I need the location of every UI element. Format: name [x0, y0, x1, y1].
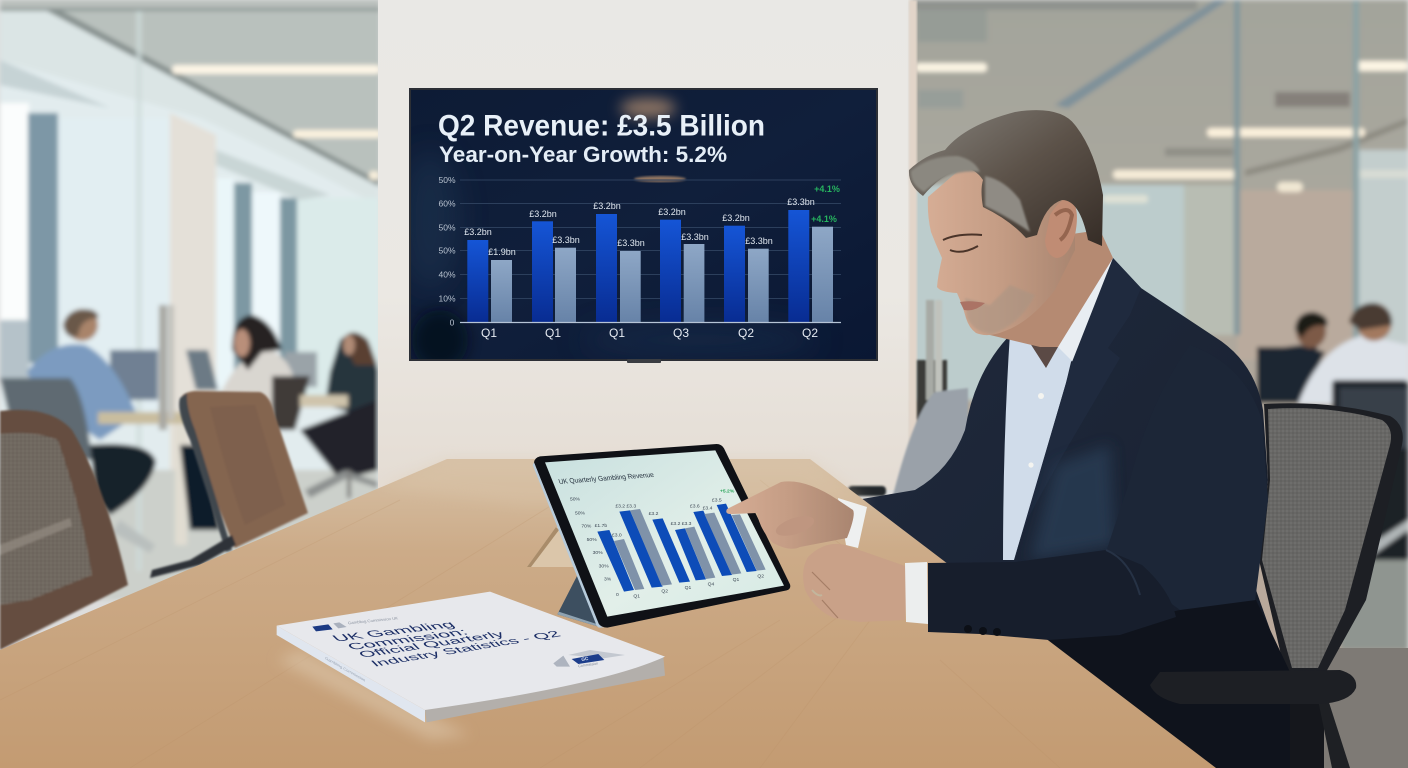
TV bar chart: 50% — [438, 175, 456, 185]
tablet bars: Q4 — [708, 582, 715, 588]
booklet title: Industry Statistics - Q2 — [368, 629, 564, 669]
tablet bars: 0 — [616, 592, 619, 598]
publisher logo top: Gambling Commission UK — [347, 616, 399, 625]
grey temple — [985, 176, 1030, 232]
tablet — [533, 444, 790, 628]
publisher logo bottom — [553, 650, 625, 668]
eye and brow — [943, 235, 982, 252]
TV bar chart: £3.2bn — [722, 213, 750, 223]
TV bar chart: 10% — [438, 294, 456, 304]
forearm sleeve — [928, 550, 1176, 640]
tablet bars: Q2 — [661, 589, 668, 595]
tablet screen — [545, 450, 784, 617]
TV bar chart: Q2 — [738, 326, 754, 340]
booklet title: Commission: — [344, 627, 471, 652]
booklet title: UK Gambling — [329, 620, 458, 644]
TV bar chart: £3.3bn — [787, 197, 815, 207]
TV bar chart: 50% — [438, 222, 456, 232]
tablet heading: UK Quarterly Gambling Revenue — [558, 471, 655, 486]
right floor — [1320, 648, 1408, 768]
tablet bars: Q1 — [685, 585, 692, 591]
booklet pages — [425, 657, 665, 722]
wall TV — [400, 88, 878, 370]
central white wall — [378, 0, 913, 490]
tablet bars: Q1 — [633, 593, 640, 599]
lap shadow — [1040, 600, 1300, 768]
tablet bars: £3.5 — [712, 497, 722, 503]
tablet bars: 3% — [604, 577, 612, 583]
left glass office background — [0, 0, 381, 600]
booklet title: Official Quarterly — [356, 630, 508, 660]
tablet stand — [557, 573, 602, 628]
mesh office chair right — [1259, 403, 1403, 672]
tablet bars: £3.0 — [612, 532, 622, 538]
tablet bars: Q1 — [733, 577, 740, 583]
tablet bars: 50% — [575, 510, 586, 516]
beard stubble — [965, 285, 1035, 334]
publisher logo bottom: GC — [581, 656, 589, 662]
tablet bars: 30% — [593, 550, 603, 556]
TV bar chart: Q3 — [673, 326, 689, 340]
TV bar chart: 60% — [438, 198, 456, 208]
TV headline: Q2 Revenue: £3.5 Billion — [438, 110, 765, 142]
TV bar chart: £3.3bn — [745, 236, 773, 246]
TV bar chart: £1.9bn — [488, 247, 516, 257]
tablet bars: £1.7b — [595, 523, 607, 529]
wall pillar edge — [909, 0, 917, 460]
publisher logo bottom: Commission — [578, 662, 598, 668]
man's head — [909, 110, 1113, 347]
man's body behind table — [856, 258, 1300, 768]
right glass office background — [912, 0, 1408, 660]
tablet bars: Q2 — [757, 573, 764, 579]
TV bar chart: Q1 — [609, 326, 625, 340]
upper sleeve — [1105, 345, 1268, 640]
TV bar chart: Q1 — [545, 326, 561, 340]
face — [928, 165, 1075, 335]
tablet bars: £3.2 £3.3 — [671, 521, 692, 527]
neck — [990, 230, 1113, 347]
ear — [1045, 199, 1077, 258]
TV bar chart: Q2 — [802, 326, 818, 340]
spine text: Gambling Commission — [325, 655, 366, 683]
TV subheading: Year-on-Year Growth: 5.2% — [439, 142, 727, 167]
booklet — [277, 592, 665, 722]
tablet bars: £3.2 — [649, 511, 659, 517]
TV bar chart: £3.3bn — [617, 238, 645, 248]
hair — [909, 110, 1103, 246]
TV bar chart: 50% — [438, 246, 456, 256]
TV bar chart: 0 — [450, 318, 455, 328]
TV bar chart — [438, 175, 841, 340]
publisher logo top — [312, 616, 399, 631]
screen reflections — [400, 98, 820, 370]
TV bar chart: £3.3bn — [681, 232, 709, 242]
TV bar chart: +4.1% — [811, 214, 837, 224]
tablet bars: £3.4 — [703, 506, 713, 512]
jacket lapel — [1014, 258, 1141, 560]
TV bar chart: 40% — [438, 270, 456, 280]
wooden table — [0, 459, 1216, 768]
booklet reflection on table — [277, 650, 470, 740]
tablet bars: 70% — [581, 524, 592, 530]
sleeve buttons — [964, 625, 1001, 636]
pointing hand — [726, 481, 867, 549]
tablet body — [534, 444, 790, 628]
TV bar chart: +4.1% — [814, 184, 840, 194]
tablet bars: £3.6 — [690, 504, 700, 510]
tablet bars: 50% — [587, 537, 597, 543]
door handle and background chair — [848, 300, 968, 500]
tablet bars: 30% — [599, 564, 609, 570]
TV bar chart: £3.2bn — [593, 201, 621, 211]
TV bar chart: £3.2bn — [658, 207, 686, 217]
tablet bars: 50% — [570, 497, 581, 503]
blurred colleagues left — [0, 309, 378, 553]
resting hand — [803, 544, 928, 624]
tablet bars: £3.2 £3.3 — [615, 504, 636, 510]
TV bar chart: £3.2bn — [529, 209, 557, 219]
jacket chest highlight and pocket — [1030, 445, 1115, 560]
shirt buttons — [1028, 393, 1044, 468]
blurred colleagues right — [1257, 303, 1408, 560]
mouth — [960, 301, 985, 310]
booklet title — [329, 620, 564, 669]
foreground mesh chair — [0, 410, 128, 650]
tan office chair — [150, 391, 308, 578]
table cable tray — [527, 527, 576, 567]
tablet bars: +5.2% — [720, 488, 735, 494]
chair armrest and post — [1150, 670, 1356, 768]
grey forelock — [911, 156, 980, 192]
tablet bars — [570, 488, 766, 599]
shirt — [1003, 258, 1119, 560]
TV bar chart: £3.3bn — [552, 235, 580, 245]
TV bar chart: Q1 — [481, 326, 497, 340]
booklet cover — [277, 592, 665, 710]
TV bar chart: £3.2bn — [464, 227, 492, 237]
